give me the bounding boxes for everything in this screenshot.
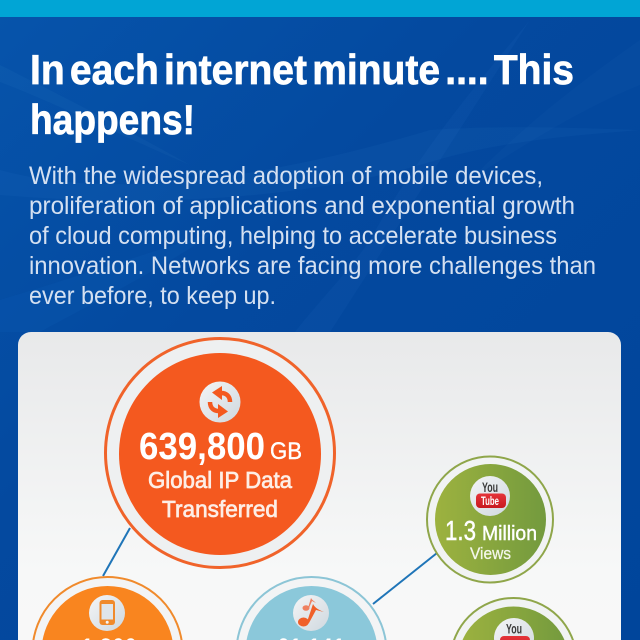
- title: In each internet minute .... This: [30, 46, 574, 93]
- icon: YouTube: Tube: [481, 494, 499, 508]
- bubble: mobile: [32, 577, 182, 640]
- label: Views: [470, 544, 511, 563]
- label: Global IP Data: [148, 467, 292, 493]
- value: Million: [482, 523, 537, 545]
- icon: music notes: [293, 595, 329, 631]
- title: happens!: [30, 96, 195, 143]
- icon: YouTube: You: [506, 620, 522, 636]
- value: 1.3: [445, 515, 476, 546]
- value: 639,800: [139, 426, 265, 468]
- label: Transferred: [162, 496, 278, 522]
- intro paragraph: With the widespread adoption of mobile devices,: [29, 162, 543, 190]
- bubble: global IP data: [106, 338, 334, 568]
- bubble: YouTube views: [427, 456, 553, 582]
- icon: phone: [89, 595, 125, 631]
- icon: YouTube: You: [482, 479, 498, 495]
- intro paragraph: ever before, to keep up.: [29, 282, 276, 310]
- intro paragraph: [29, 162, 596, 310]
- intro paragraph: of cloud computing, helping to accelerate business: [29, 222, 557, 250]
- value: [140, 432, 302, 465]
- value: [446, 520, 536, 540]
- icon: YouTube: [470, 476, 510, 516]
- panel: statistics: [18, 332, 621, 640]
- label: [148, 470, 292, 518]
- icon: sync arrows: [200, 382, 240, 422]
- intro paragraph: proliferation of applications and exponential growth: [29, 192, 575, 220]
- bubble: music: [236, 577, 386, 640]
- connector lines: [103, 528, 437, 604]
- value: GB: [270, 438, 302, 465]
- top cyan bar: [0, 0, 640, 17]
- bubble: YouTube second: [450, 598, 576, 640]
- intro paragraph: innovation. Networks are facing more challenges than: [29, 252, 596, 280]
- title: [30, 46, 574, 143]
